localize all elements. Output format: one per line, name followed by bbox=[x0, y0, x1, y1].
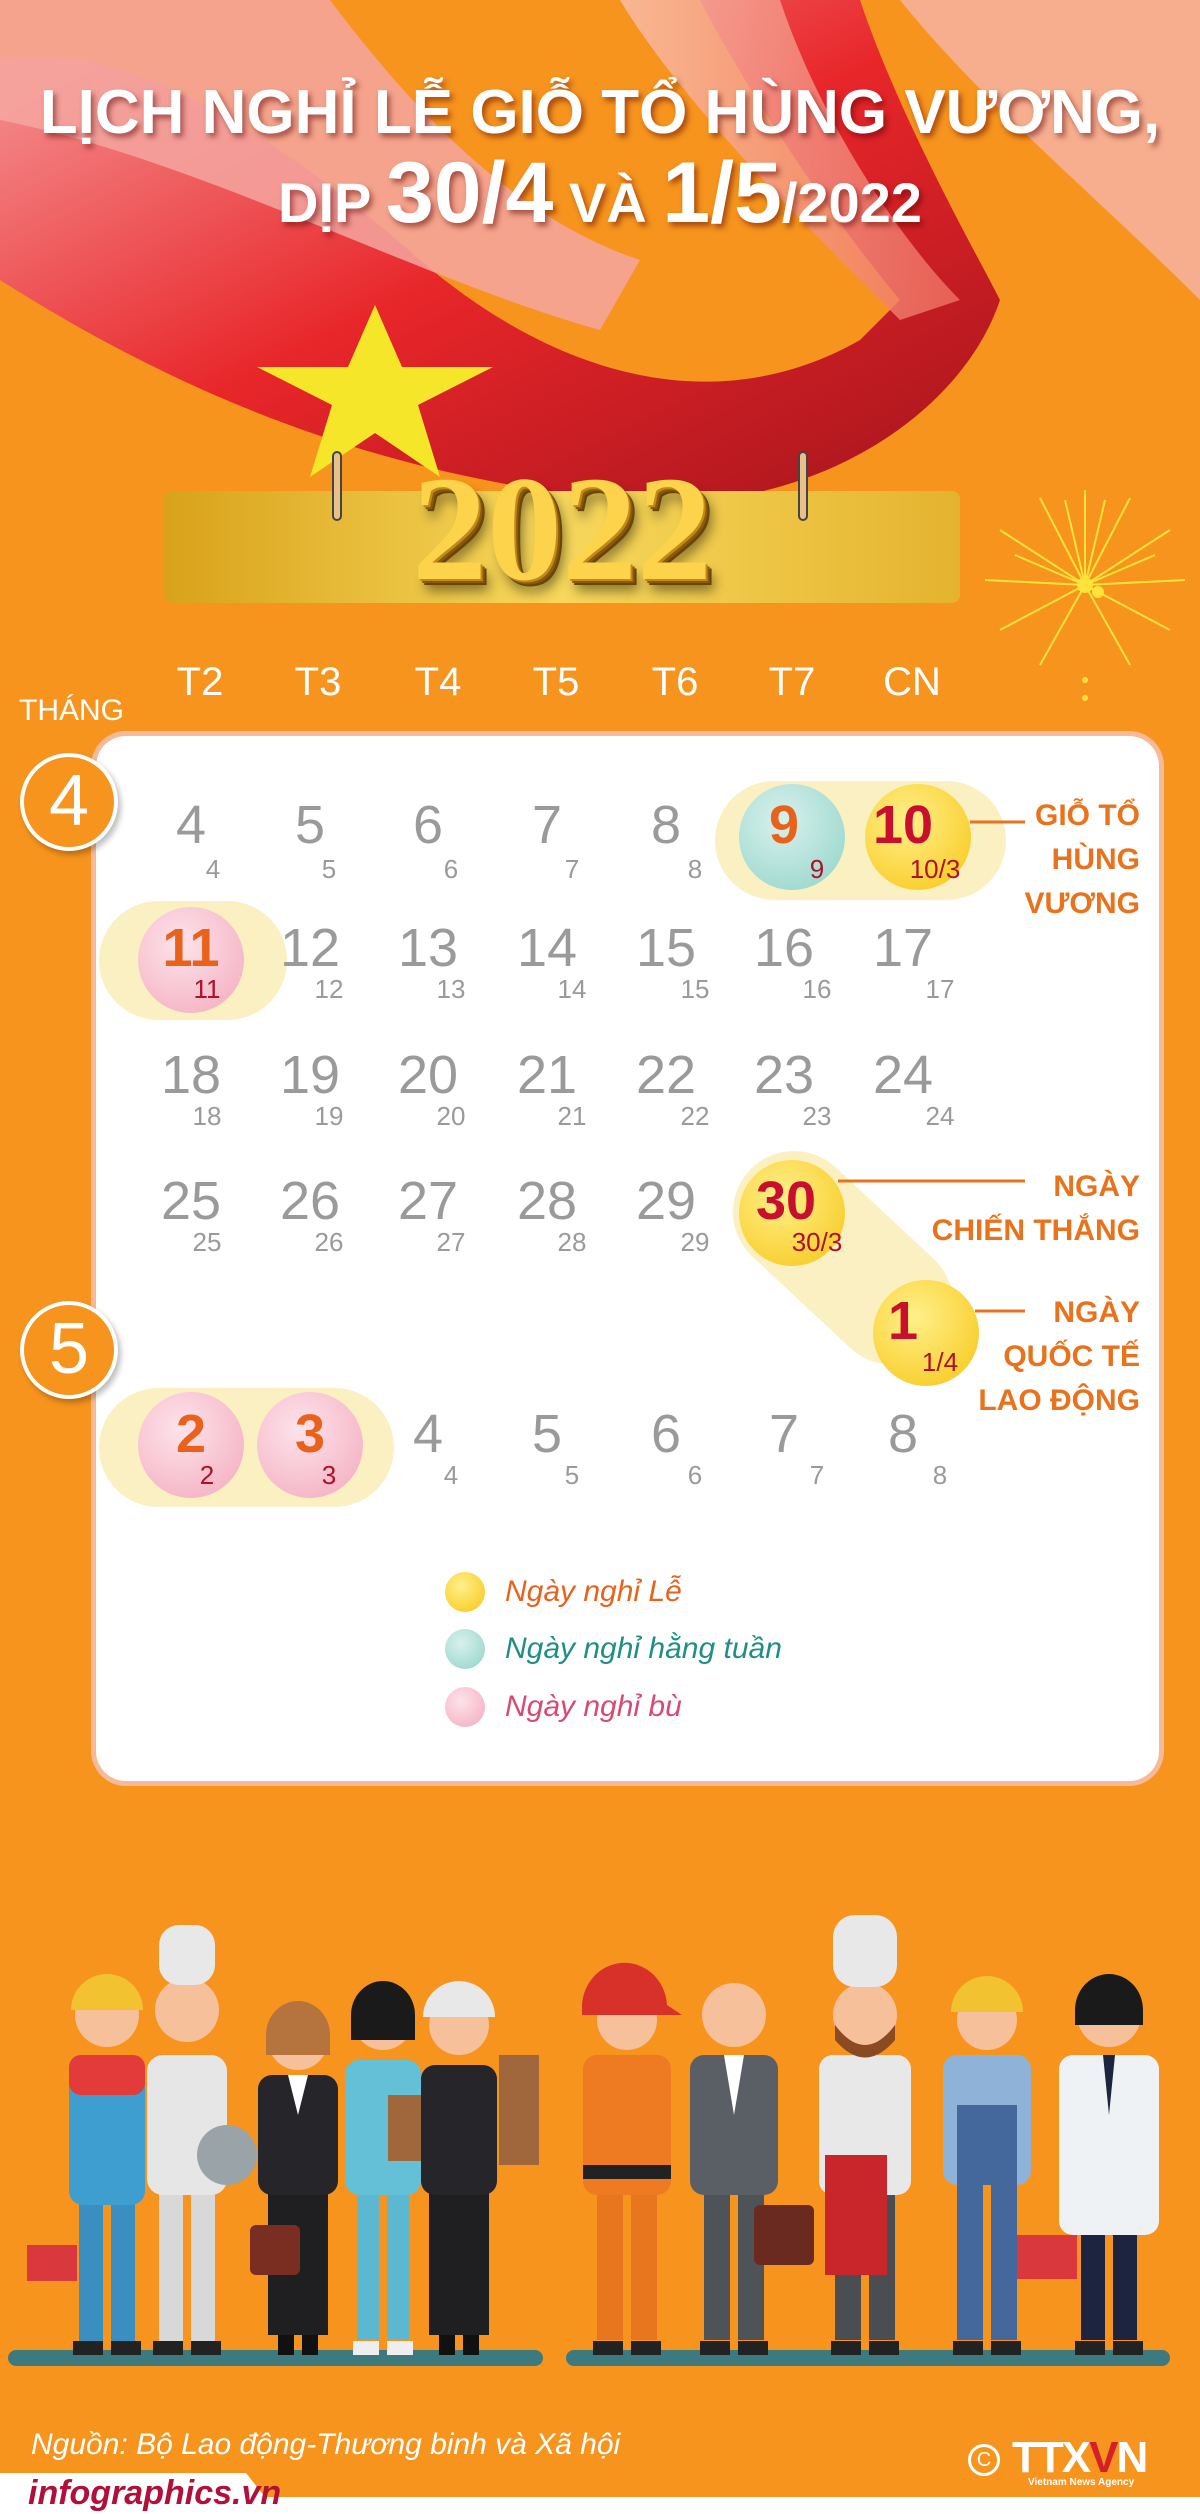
calendar numbers: 4 bbox=[413, 1404, 443, 1464]
calendar numbers: 12 bbox=[280, 918, 340, 978]
calendar numbers: 21 bbox=[558, 1101, 586, 1131]
panel: calendar bbox=[96, 736, 1159, 1781]
calendar numbers: 17 bbox=[926, 974, 954, 1004]
calendar numbers: 5 bbox=[322, 854, 336, 884]
title bbox=[40, 77, 1163, 241]
calendar numbers: 26 bbox=[315, 1227, 343, 1257]
calendar numbers: 25 bbox=[193, 1227, 221, 1257]
calendar numbers: 9 bbox=[810, 854, 824, 884]
calendar numbers: 15 bbox=[681, 974, 709, 1004]
icon: month 5: 5 bbox=[49, 1309, 89, 1389]
callout: Quoc te Lao dong bbox=[978, 1296, 1140, 1417]
highlight pills bbox=[99, 781, 1006, 1507]
calendar numbers: 6 bbox=[444, 854, 458, 884]
calendar numbers: 27 bbox=[398, 1171, 458, 1231]
calendar numbers: 21 bbox=[517, 1045, 577, 1105]
calendar numbers: 29 bbox=[636, 1171, 696, 1231]
calendar numbers: 8 bbox=[888, 1404, 918, 1464]
weekday header: T5 bbox=[533, 660, 579, 704]
calendar numbers: 14 bbox=[517, 918, 577, 978]
calendar numbers: 20 bbox=[437, 1101, 465, 1131]
legend bbox=[445, 1572, 782, 1727]
calendar numbers: 25 bbox=[161, 1171, 221, 1231]
calendar numbers: 13 bbox=[437, 974, 465, 1004]
calendar numbers: 4 bbox=[176, 795, 206, 855]
weekday header: T6 bbox=[652, 660, 698, 704]
calendar numbers: 8 bbox=[933, 1460, 947, 1490]
figure: nurse bbox=[345, 1981, 428, 2355]
calendar numbers: 27 bbox=[437, 1227, 465, 1257]
weekday header: T4 bbox=[415, 660, 461, 704]
legend: Ngày nghỉ hằng tuần bbox=[505, 1632, 782, 1665]
calendar numbers: 24 bbox=[873, 1045, 933, 1105]
calendar numbers: 6 bbox=[413, 795, 443, 855]
calendar numbers: 7 bbox=[565, 854, 579, 884]
calendar numbers: 23 bbox=[754, 1045, 814, 1105]
calendar numbers bbox=[161, 795, 960, 1490]
calendar numbers: 8 bbox=[688, 854, 702, 884]
calendar numbers: 5 bbox=[532, 1404, 562, 1464]
figure: woman worker bbox=[27, 1974, 145, 2355]
figure: old businessman bbox=[690, 1983, 814, 2355]
figure: chef man bbox=[819, 1915, 911, 2355]
calendar numbers: 7 bbox=[810, 1460, 824, 1490]
icon: firework bbox=[985, 490, 1185, 701]
calendar numbers: 20 bbox=[398, 1045, 458, 1105]
circles: holidays bbox=[138, 784, 979, 1498]
callout: Quoc te Lao dong: NGÀY bbox=[1053, 1296, 1140, 1329]
calendar numbers: 10/3 bbox=[910, 854, 960, 884]
icon: star bbox=[257, 305, 493, 477]
callout: Ngay Chien Thang: CHIẾN THẮNG bbox=[932, 1214, 1140, 1247]
calendar numbers: 16 bbox=[754, 918, 814, 978]
callout: Quoc te Lao dong: QUỐC TẾ bbox=[1003, 1340, 1140, 1373]
figure: doctor bbox=[1059, 1974, 1159, 2355]
logo: TTXVN bbox=[968, 2433, 1146, 2488]
calendar numbers: 14 bbox=[558, 974, 586, 1004]
calendar numbers: 30 bbox=[756, 1171, 816, 1231]
calendar numbers: 3 bbox=[295, 1404, 325, 1464]
calendar numbers: 30/3 bbox=[792, 1227, 842, 1257]
calendar numbers: 7 bbox=[532, 795, 562, 855]
callout lines bbox=[838, 820, 1025, 1312]
callout: Quoc te Lao dong: LAO ĐỘNG bbox=[978, 1384, 1140, 1417]
calendar numbers: 4 bbox=[444, 1460, 458, 1490]
callout: Gio To Hung Vuong: HÙNG bbox=[1052, 843, 1140, 876]
callout: Gio To Hung Vuong bbox=[1024, 798, 1140, 920]
logo: TTXVN: Vietnam News Agency bbox=[1028, 2477, 1134, 2488]
calendar numbers: 28 bbox=[558, 1227, 586, 1257]
calendar numbers: 5 bbox=[565, 1460, 579, 1490]
calendar numbers: 1 bbox=[888, 1291, 918, 1351]
weekday header: T2 bbox=[177, 660, 223, 704]
calendar numbers: 6 bbox=[688, 1460, 702, 1490]
calendar numbers: 3 bbox=[322, 1460, 336, 1490]
calendar numbers: 16 bbox=[803, 974, 831, 1004]
calendar numbers: 5 bbox=[295, 795, 325, 855]
calendar numbers: 10 bbox=[873, 795, 933, 855]
weekday header: T7 bbox=[769, 660, 815, 704]
figure: engineer woman bbox=[421, 1981, 539, 2355]
callout: Gio To Hung Vuong: GIỖ TỔ bbox=[1035, 799, 1140, 832]
figure: business woman bbox=[250, 2001, 338, 2355]
calendar numbers: 13 bbox=[398, 918, 458, 978]
calendar numbers: 1/4 bbox=[922, 1347, 958, 1377]
callout: Gio To Hung Vuong: VƯƠNG bbox=[1024, 887, 1140, 920]
logo: TTXVN: C bbox=[977, 2449, 991, 2471]
calendar numbers: 9 bbox=[769, 795, 799, 855]
calendar numbers: 29 bbox=[681, 1227, 709, 1257]
callout: Ngay Chien Thang: NGÀY bbox=[1053, 1170, 1140, 1203]
calendar numbers: 22 bbox=[681, 1101, 709, 1131]
icon: month 5 bbox=[20, 1301, 118, 1399]
calendar numbers: 18 bbox=[193, 1101, 221, 1131]
footer strip bbox=[0, 2473, 1200, 2514]
brand: infographics.vn: infographics.vn bbox=[28, 2474, 281, 2512]
calendar numbers: 15 bbox=[636, 918, 696, 978]
logo: TTXVN: TTXVN bbox=[1012, 2433, 1146, 2482]
figure: worker man bbox=[943, 1976, 1077, 2355]
calendar numbers: 26 bbox=[280, 1171, 340, 1231]
callout: Ngay Chien Thang bbox=[932, 1170, 1140, 1247]
calendar numbers: 22 bbox=[636, 1045, 696, 1105]
weekday header: T3 bbox=[295, 660, 341, 704]
calendar numbers: 19 bbox=[280, 1045, 340, 1105]
weekday header: CN bbox=[883, 660, 941, 704]
icon: month 4: 4 bbox=[49, 761, 89, 841]
calendar numbers: 8 bbox=[651, 795, 681, 855]
calendar numbers: 11 bbox=[194, 974, 220, 1004]
legend: Ngày nghỉ bù bbox=[505, 1690, 682, 1723]
calendar numbers: 12 bbox=[315, 974, 343, 1004]
source text: Nguồn: Bộ Lao động-Thương binh và Xã hội bbox=[31, 2428, 620, 2461]
illustration: workers bbox=[8, 1915, 1170, 2366]
calendar numbers: 2 bbox=[176, 1404, 206, 1464]
legend: Ngày nghỉ Lễ bbox=[505, 1575, 682, 1608]
calendar numbers: 11 bbox=[162, 918, 220, 978]
calendar numbers: 6 bbox=[651, 1404, 681, 1464]
weekday header: THÁNG bbox=[19, 694, 124, 727]
icon: month 4 bbox=[20, 753, 118, 851]
figure: fireman bbox=[582, 1963, 682, 2355]
background ribbon bbox=[0, 0, 1200, 491]
title: DỊP 30/4 VÀ 1/5/2022 bbox=[278, 145, 922, 241]
calendar numbers: 18 bbox=[161, 1045, 221, 1105]
calendar numbers: 19 bbox=[315, 1101, 343, 1131]
calendar numbers: 24 bbox=[926, 1101, 954, 1131]
calendar numbers: 2 bbox=[200, 1460, 214, 1490]
calendar numbers: 23 bbox=[803, 1101, 831, 1131]
calendar numbers: 28 bbox=[517, 1171, 577, 1231]
calendar numbers: 4 bbox=[206, 854, 220, 884]
calendar numbers: 7 bbox=[769, 1404, 799, 1464]
banner 2022 bbox=[164, 491, 960, 603]
weekday header bbox=[19, 660, 941, 727]
banner 2022: 2022 bbox=[412, 446, 712, 612]
title: LỊCH NGHỈ LỄ GIỖ TỔ HÙNG VƯƠNG, bbox=[40, 78, 1160, 147]
figure: chef woman bbox=[147, 1925, 257, 2355]
calendar numbers: 17 bbox=[873, 918, 933, 978]
